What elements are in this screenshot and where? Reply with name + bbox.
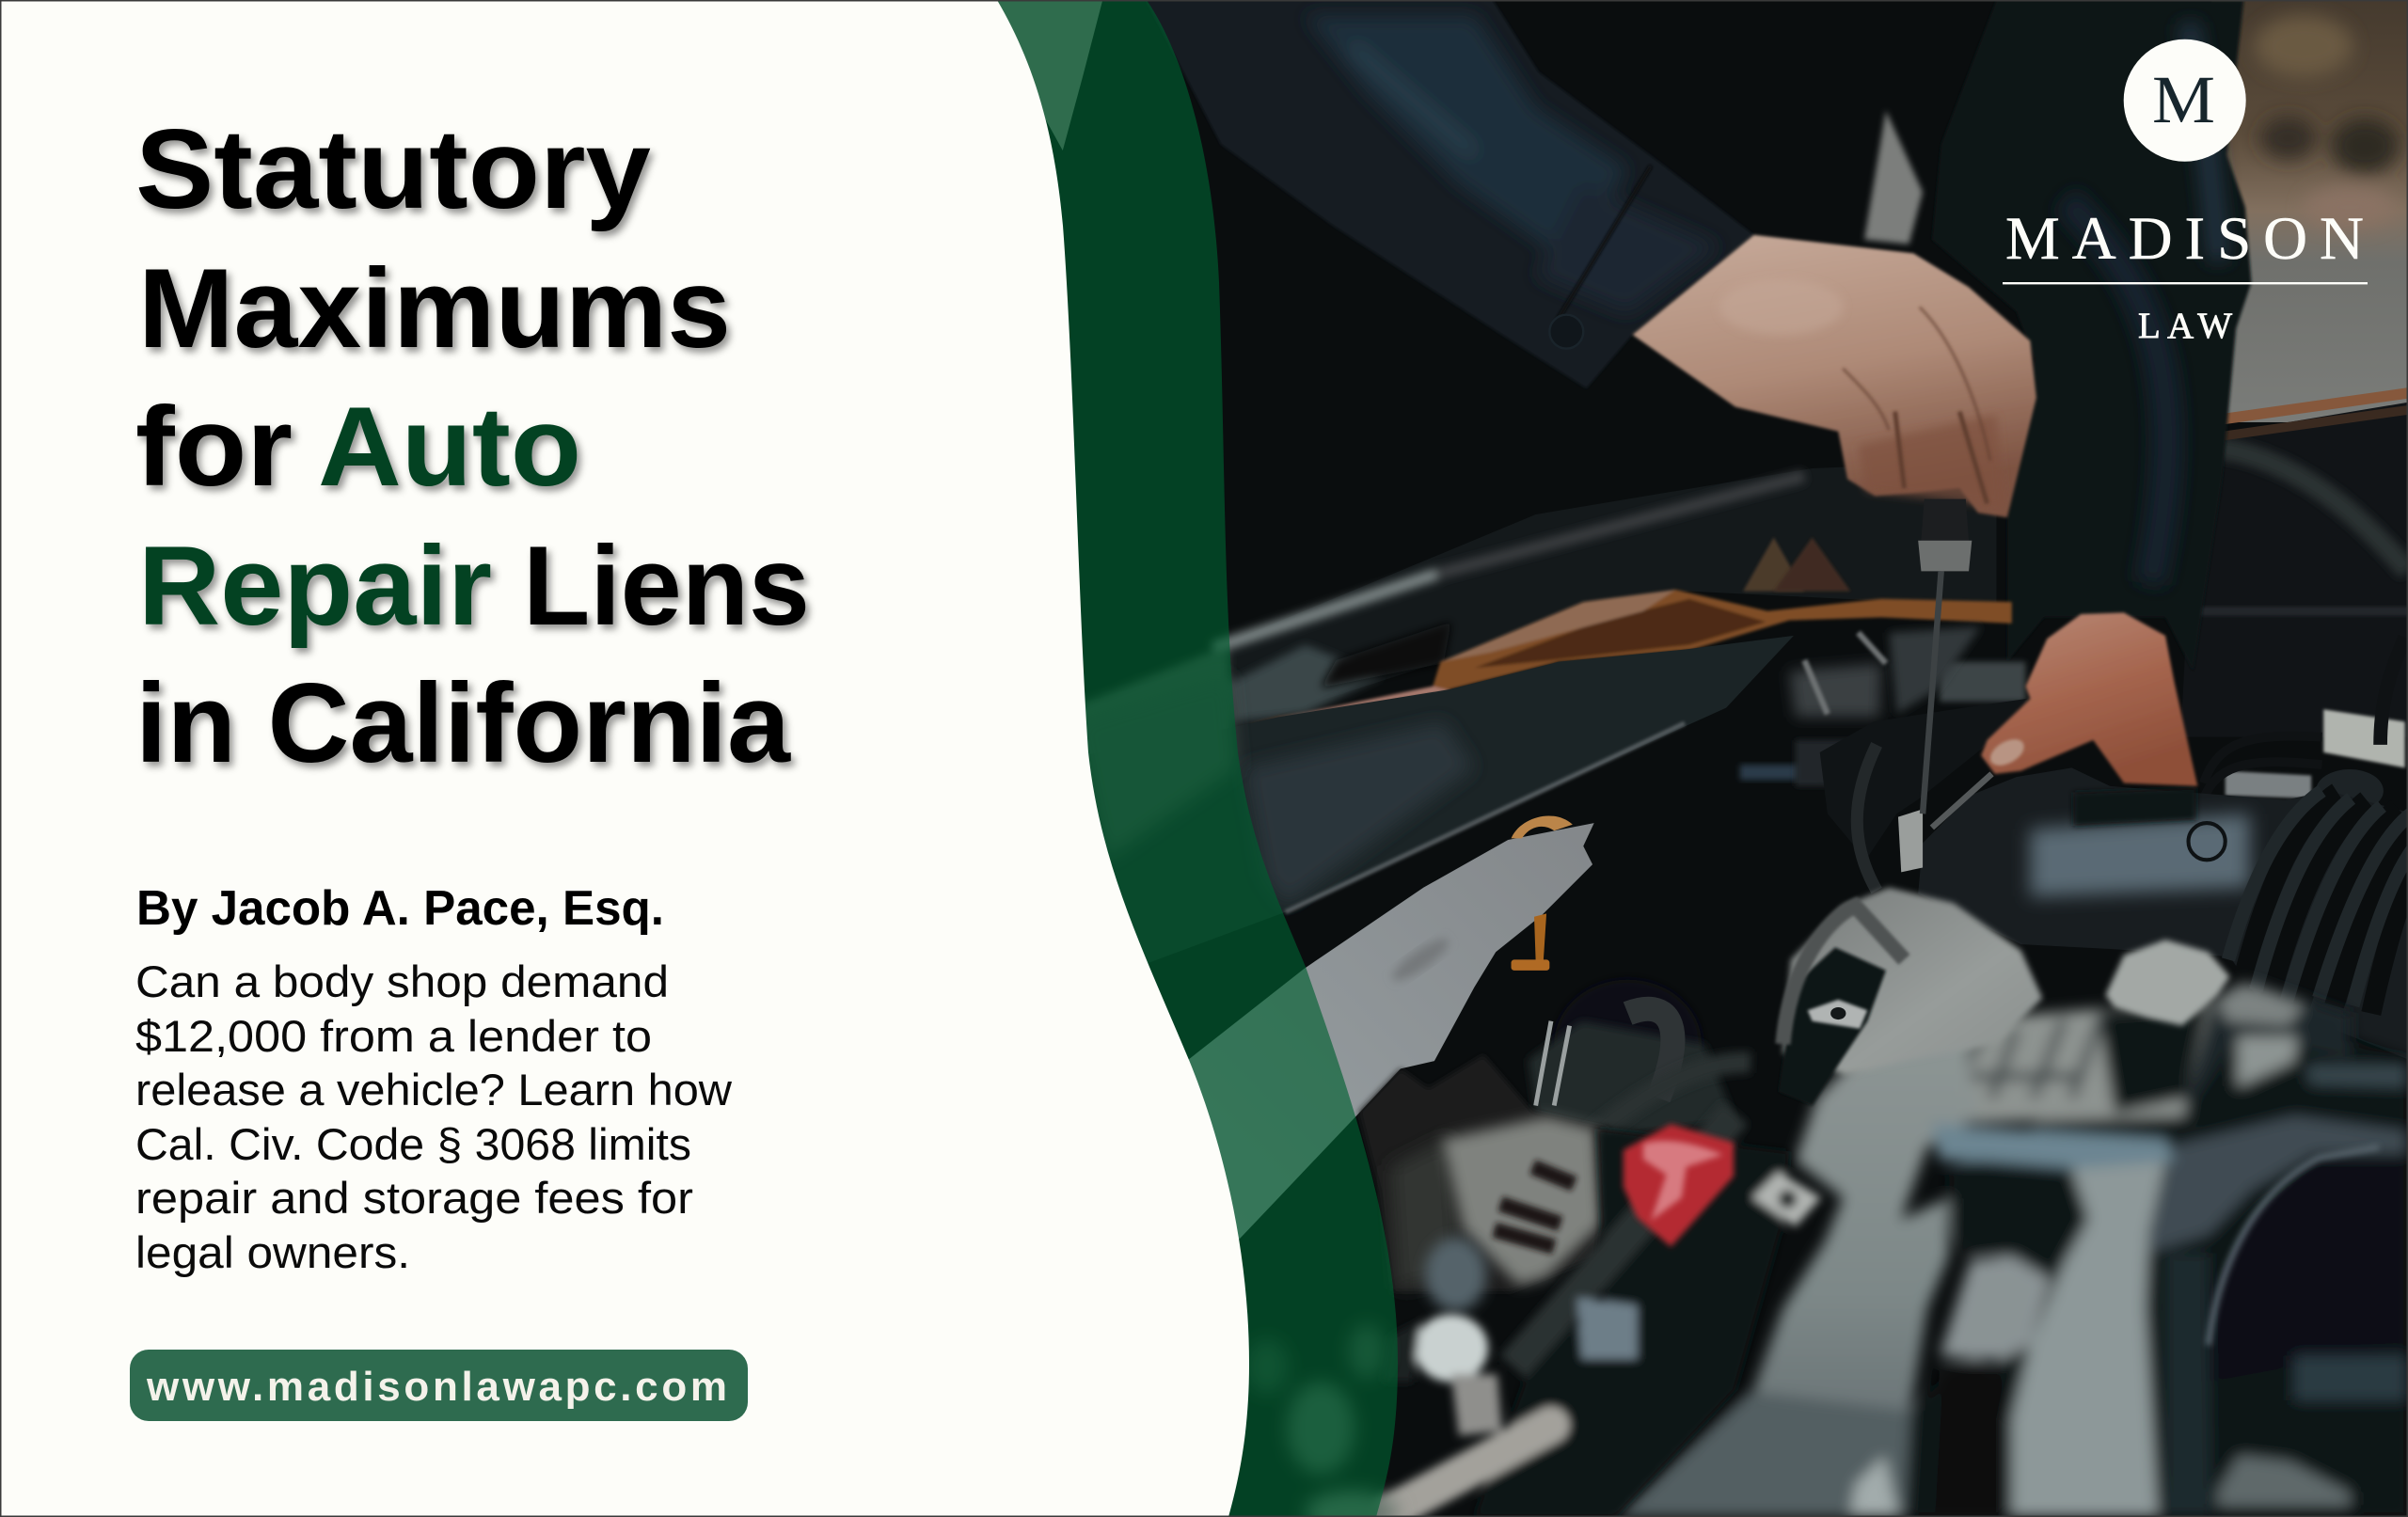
- photo: alternator: [1359, 1055, 1609, 1311]
- photo: dark textured hood panel: [1060, 636, 1794, 968]
- logo sub-wordmark: LAW: [2138, 306, 2232, 346]
- cream left panel: [0, 0, 1249, 1517]
- photo: air intake hose with ribs: [1898, 767, 2408, 1060]
- photo: engine mass, blurred foreground: [1616, 983, 2408, 1517]
- photo: bracket and wires top right: [2204, 638, 2405, 813]
- website button: www.madisonlawapc.com: [146, 1364, 727, 1410]
- logo icon: M in circle: [2124, 40, 2246, 162]
- author byline: By Jacob A. Pace, Esq.: [136, 881, 664, 936]
- photo: light gap behind the mechanic: [1864, 111, 1923, 245]
- intro paragraph: $12,000 from a lender to: [135, 1011, 652, 1061]
- title: Liens: [523, 523, 810, 649]
- photo: lower left engine parts: [1382, 1114, 1821, 1517]
- photo: top left light reflection under the green band: [983, 0, 1102, 150]
- photo: upper engine covers: [1779, 888, 2230, 1106]
- photo: oil cap and dipstick: [1512, 815, 1573, 971]
- title: for: [135, 384, 293, 510]
- title: Auto: [318, 384, 581, 510]
- photo: mechanic's lower hand: [1981, 612, 2197, 786]
- intro paragraph: Cal. Civ. Code § 3068 limits: [135, 1119, 691, 1169]
- intro paragraph: Can a body shop demand: [135, 956, 669, 1006]
- photo: mechanic working on a car engine: [983, 0, 2408, 1517]
- photo: red cap: [1624, 1124, 1734, 1247]
- photo: wiring and hose connector: [1528, 980, 1751, 1144]
- intro paragraph: [135, 956, 733, 1277]
- green wave band: [941, 0, 1398, 1517]
- title: [135, 106, 810, 786]
- photo background: blurred outdoors top right: [2211, 0, 2408, 422]
- photo: hood underside and grey streaks: [1075, 461, 1996, 767]
- logo icon: M in circle: M: [2152, 62, 2215, 137]
- photo: mechanic's upper hand: [1633, 235, 2036, 517]
- photo: jacket sleeve: [1146, 0, 1753, 388]
- photo: grey fender: [1182, 823, 1594, 1240]
- website button: [130, 1350, 748, 1421]
- title: Statutory: [135, 106, 651, 232]
- logo: Madison Law: [2003, 40, 2368, 346]
- photo: mottled lower band background: [1245, 1323, 1398, 1517]
- photo: orange hood panel: [1247, 590, 2012, 725]
- photo: jacket torso right: [1932, 0, 2251, 671]
- logo wordmark: MADISON: [2005, 205, 2364, 273]
- photo: car hood on the right: [2180, 393, 2408, 737]
- intro paragraph: legal owners.: [135, 1227, 410, 1277]
- photo: mid engine bay details: [1740, 626, 2027, 891]
- title: Repair: [138, 523, 492, 649]
- intro paragraph: repair and storage fees for: [135, 1173, 693, 1223]
- intro paragraph: release a vehicle? Learn how: [135, 1065, 733, 1114]
- title: Maximums: [138, 245, 731, 371]
- title: in California: [135, 660, 791, 786]
- photo: screwdriver: [1918, 499, 1972, 814]
